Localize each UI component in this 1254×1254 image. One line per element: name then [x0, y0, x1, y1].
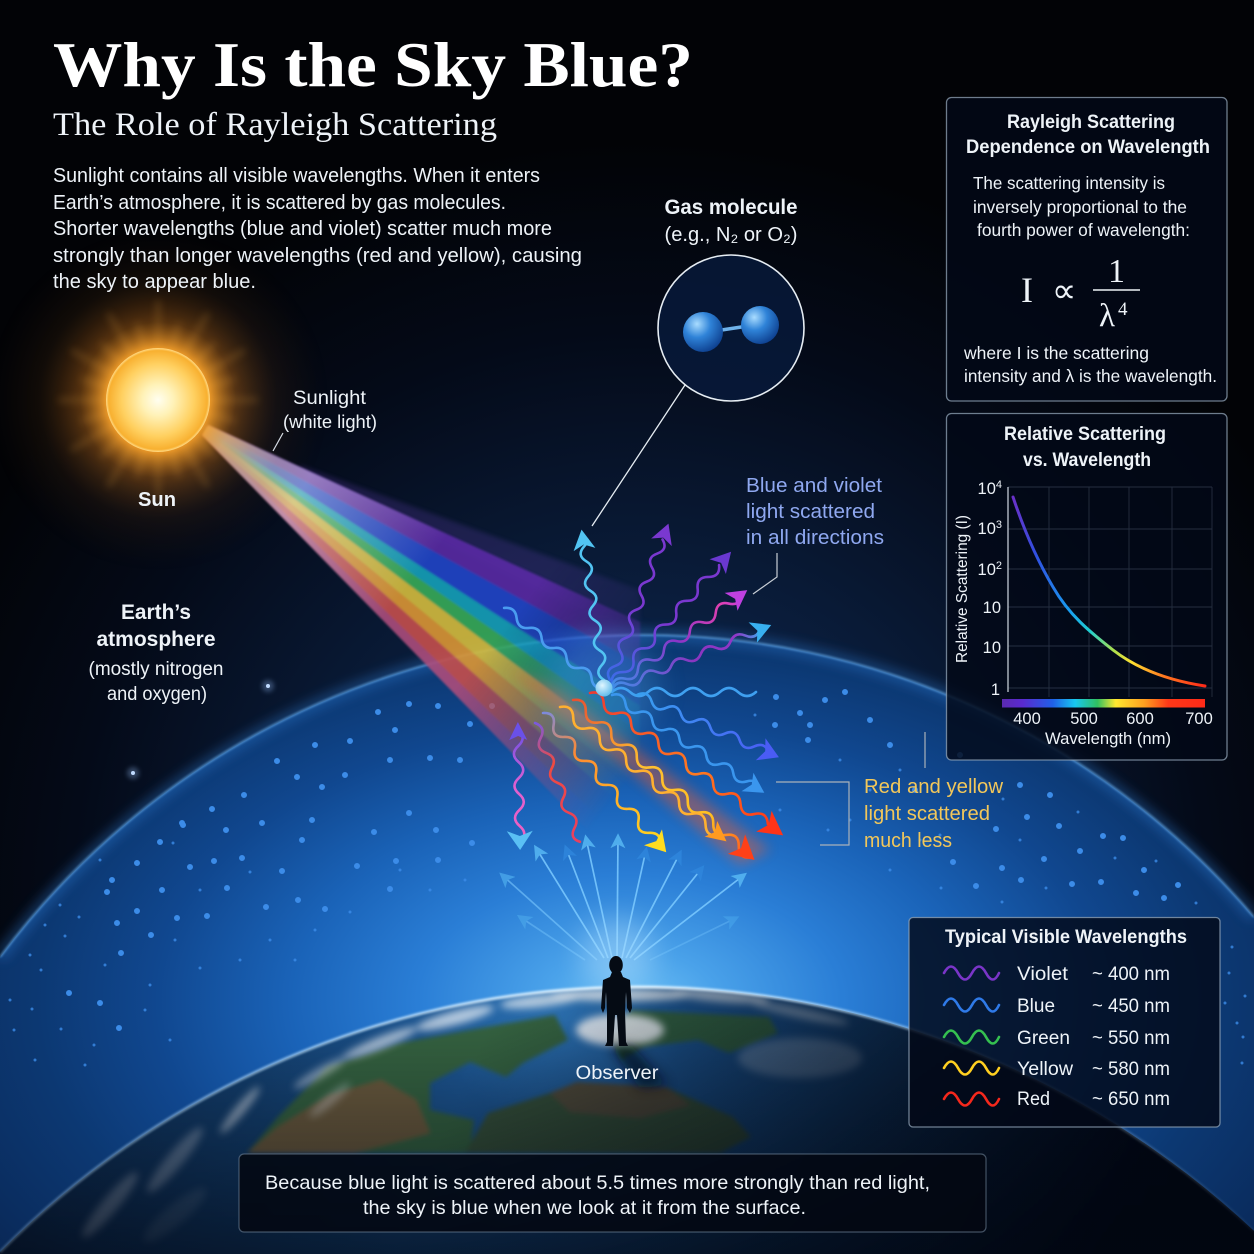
red and yellow callout: Red and yellow — [864, 775, 1003, 798]
Earth's atmosphere label: (mostly nitrogen — [88, 659, 224, 680]
gas molecule magnifier with O2/N2 molecule — [658, 255, 804, 401]
formula: 4 — [1118, 299, 1128, 320]
y axis tick labels: 4 — [996, 479, 1002, 491]
panel heading: Dependence on Wavelength — [966, 136, 1210, 158]
chart heading — [1004, 423, 1166, 471]
Earth's atmosphere label: Earth’s — [121, 600, 191, 624]
wave: red — [582, 683, 791, 846]
panel heading: Rayleigh Scattering — [1007, 111, 1175, 133]
Earth limb glow — [0, 987, 1254, 1252]
leader line from molecule to scatter point — [592, 385, 685, 526]
legend row: green — [944, 1027, 1170, 1049]
explanation text: The scattering intensity is — [973, 173, 1165, 193]
chart heading: Relative Scattering — [1004, 423, 1166, 445]
sunlight label — [273, 387, 377, 451]
explanation text — [973, 173, 1190, 240]
x axis title: Wavelength (nm) — [1045, 730, 1171, 748]
scatter point particle — [596, 680, 612, 696]
x axis tick labels: 700 — [1185, 710, 1213, 728]
sunlight label: (white light) — [283, 411, 377, 432]
legend row: blue: ~ 450 nm — [1092, 995, 1170, 1017]
gas molecule label — [664, 195, 798, 246]
formula: 1 — [1108, 253, 1125, 290]
legend row: green: Green — [1017, 1027, 1070, 1049]
y axis tick labels: 10 — [983, 599, 1001, 617]
formula: I — [1021, 270, 1033, 310]
observer label: Observer — [576, 1062, 659, 1084]
y axis tick labels — [978, 479, 1002, 699]
wave: orange red — [564, 690, 763, 870]
gas molecule label: Gas molecule — [664, 195, 798, 219]
legend row: red: ~ 650 nm — [1092, 1088, 1170, 1110]
Earth's atmosphere label: atmosphere — [96, 627, 216, 651]
wave: light blue purple — [608, 615, 775, 700]
formula: λ — [1099, 298, 1115, 334]
red and yellow callout: much less — [864, 829, 952, 852]
legend row: red — [944, 1088, 1170, 1110]
legend row: green: ~ 550 nm — [1092, 1027, 1170, 1049]
conclusion callout: Because blue light is scattered about 5.5 times more strongly than red light, — [265, 1172, 930, 1194]
wavelength colour bar — [1002, 699, 1205, 708]
Earth globe — [0, 980, 1254, 1254]
sunlight label: Sunlight — [293, 387, 367, 409]
wave: pink with arrows — [505, 722, 533, 850]
legend row: blue: Blue — [1017, 995, 1055, 1017]
formula notes — [963, 343, 1217, 386]
wave: orange — [554, 699, 733, 849]
formula notes: where I is the scattering — [963, 343, 1149, 363]
blue and violet callout — [746, 474, 884, 594]
wave: purple — [600, 520, 679, 684]
formula notes: intensity and λ is the wavelength. — [964, 366, 1217, 386]
blue and violet callout: in all directions — [746, 526, 884, 549]
y axis tick labels: 1 — [991, 681, 1000, 699]
conclusion callout: the sky is blue when we look at it from the surface. — [363, 1197, 806, 1219]
x axis tick labels — [1013, 710, 1213, 728]
hazy glow around scatter point — [549, 633, 659, 743]
conclusion callout — [239, 1154, 986, 1232]
legend row: yellow: ~ 580 nm — [1092, 1058, 1170, 1080]
wave: magenta — [606, 581, 754, 697]
gas molecule label: (e.g., N₂ or O₂) — [664, 224, 798, 246]
intro text block: strongly than longer wavelengths (red and yellow), causing — [53, 245, 582, 267]
scattered light waves — [502, 520, 791, 870]
bright rays at observer — [581, 919, 653, 991]
legend row: yellow: Yellow — [1017, 1058, 1074, 1080]
Earth's atmosphere label — [88, 600, 224, 705]
red and yellow callout: light scattered — [864, 802, 990, 825]
Earth's atmosphere label: and oxygen) — [107, 684, 207, 705]
wave: blue back along the beam — [502, 605, 607, 691]
x axis tick labels: 600 — [1126, 710, 1154, 728]
wave: yellow — [534, 705, 675, 860]
intro text block: the sky to appear blue. — [53, 271, 256, 293]
x axis tick labels: 400 — [1013, 710, 1041, 728]
wave: blue — [606, 686, 770, 802]
y axis tick labels: 2 — [996, 560, 1002, 572]
atmospheric gas molecules: blue dots — [10, 692, 1245, 1065]
panel: Rayleigh scattering formula — [946, 98, 1227, 401]
subtitle: The Role of Rayleigh Scattering — [53, 107, 497, 143]
wave: red down-left — [531, 721, 584, 843]
legend row: violet — [944, 963, 1170, 985]
legend row: red: Red — [1017, 1088, 1050, 1110]
legend row: violet: ~ 400 nm — [1092, 963, 1170, 985]
panel: relative scattering chart — [946, 414, 1227, 760]
y axis title: Relative Scattering (I) — [954, 515, 971, 663]
title: Why Is the Sky Blue? — [53, 29, 693, 100]
chart heading: vs. Wavelength — [1023, 449, 1151, 471]
intro text block: Sunlight contains all visible wavelengths. When it enters — [53, 165, 540, 187]
explanation text: inversely proportional to the — [973, 197, 1187, 217]
red and yellow callout — [776, 732, 1003, 852]
blue and violet callout: light scattered — [746, 500, 875, 523]
chart axis — [1007, 487, 1009, 692]
fan of scattered blue light reaching observer — [502, 837, 744, 960]
intro text block: Earth’s atmosphere, it is scattered by gas molecules. — [53, 192, 506, 214]
clouds — [77, 986, 862, 1248]
Sun — [0, 230, 328, 570]
x axis tick labels: 500 — [1070, 710, 1098, 728]
y axis tick labels: 10 — [978, 561, 996, 579]
blue and violet callout: Blue and violet — [746, 474, 882, 497]
wave: cyan upward — [571, 528, 615, 682]
wave: violet — [604, 544, 739, 691]
light beam: white sunlight split into colours — [202, 424, 641, 820]
y axis tick labels: 3 — [996, 519, 1002, 531]
wave: blue sideways — [612, 688, 756, 696]
panel heading — [966, 111, 1210, 158]
explanation text: fourth power of wavelength: — [977, 220, 1190, 240]
y axis tick labels: 10 — [978, 480, 996, 498]
y axis tick labels: 10 — [983, 639, 1001, 657]
intro text block: Shorter wavelengths (blue and violet) scatter much more — [53, 218, 552, 240]
formula: ∝ — [1052, 271, 1076, 311]
observer silhouette — [601, 956, 668, 1088]
land masses — [247, 1010, 778, 1153]
wave: indigo — [632, 684, 784, 768]
legend heading: Typical Visible Wavelengths — [945, 926, 1187, 948]
legend row: violet: Violet — [1017, 963, 1069, 985]
legend row: yellow — [944, 1058, 1170, 1080]
legend row: blue — [944, 995, 1170, 1017]
red glow streak — [510, 670, 770, 865]
y axis tick labels: 10 — [978, 520, 996, 538]
Sun label: Sun — [138, 488, 176, 511]
intro text block — [53, 165, 582, 293]
panel: typical visible wavelengths legend — [909, 918, 1220, 1127]
scattering curve — [1013, 497, 1205, 686]
formula — [1021, 253, 1140, 334]
